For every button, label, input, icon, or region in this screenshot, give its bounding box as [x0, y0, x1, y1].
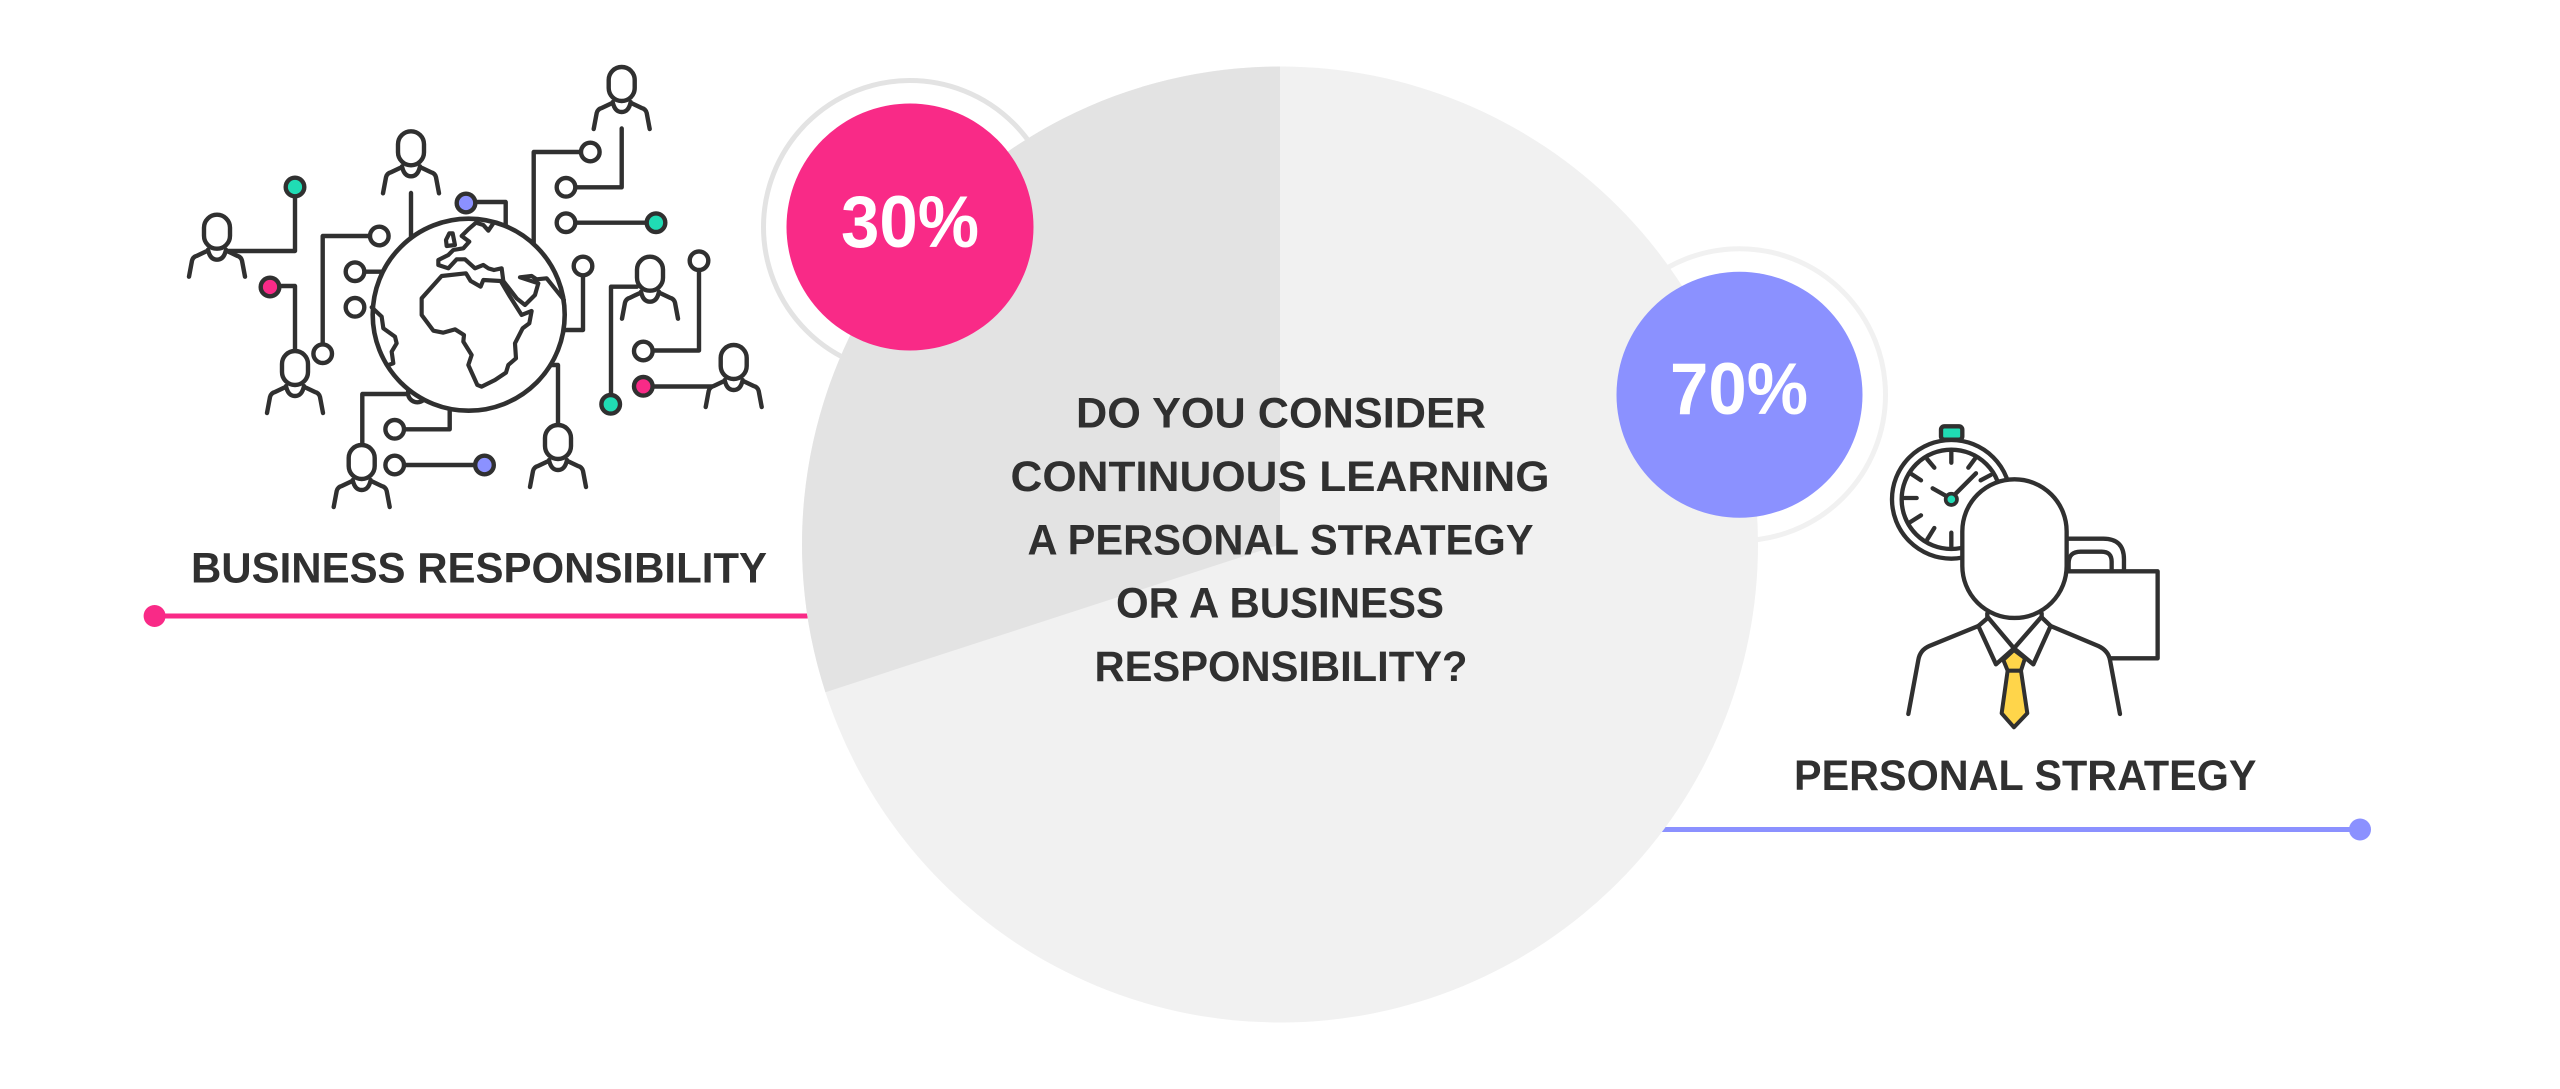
network nodes: [261, 143, 708, 474]
question text: RESPONSIBILITY?: [1094, 643, 1468, 691]
question text: A PERSONAL STRATEGY: [1028, 516, 1534, 564]
shoulders: [1908, 617, 2120, 714]
ring: 30% badge outline: [764, 80, 1056, 374]
pie slice: business responsibility 30%: [802, 66, 1280, 692]
question text: OR A BUSINESS: [1116, 580, 1444, 628]
question text: CONTINUOUS LEARNING: [1010, 453, 1550, 501]
collar: [1978, 613, 2051, 664]
icon: person with stopwatch and briefcase: [1892, 426, 2158, 727]
badge: 30%: 30%: [841, 182, 979, 263]
leader line: personal strategy: [1640, 818, 2371, 840]
question text: [1010, 390, 1550, 691]
heading: business responsibility: BUSINESS RESPONSIBILITY: [191, 544, 767, 592]
badge: 70%: [1616, 272, 1862, 518]
necktie: [2002, 650, 2027, 727]
leader line: business responsibility: [144, 605, 830, 627]
pie chart: [802, 66, 1758, 1022]
person 3: [594, 67, 650, 129]
ring: 70% badge outline: [1594, 249, 1886, 541]
person 8: [267, 351, 323, 413]
head: [1962, 479, 2067, 618]
person 5: [706, 345, 762, 407]
person 6: [530, 425, 586, 487]
globe: [372, 219, 565, 411]
network connectors: [227, 128, 712, 465]
person 2: [383, 131, 439, 193]
pie slice: personal strategy 70%: [802, 66, 1758, 1022]
badge: 30%: [786, 104, 1034, 350]
badge: 70%: 70%: [1670, 349, 1808, 430]
briefcase: [2053, 539, 2158, 658]
heading: personal strategy: PERSONAL STRATEGY: [1794, 752, 2256, 800]
icon: global network of people: [189, 67, 762, 507]
person 4: [622, 257, 678, 319]
question text: DO YOU CONSIDER: [1076, 390, 1486, 438]
stopwatch: [1892, 426, 2011, 559]
person 1: [189, 215, 245, 277]
continents: [372, 223, 564, 387]
person 7: [334, 445, 390, 507]
